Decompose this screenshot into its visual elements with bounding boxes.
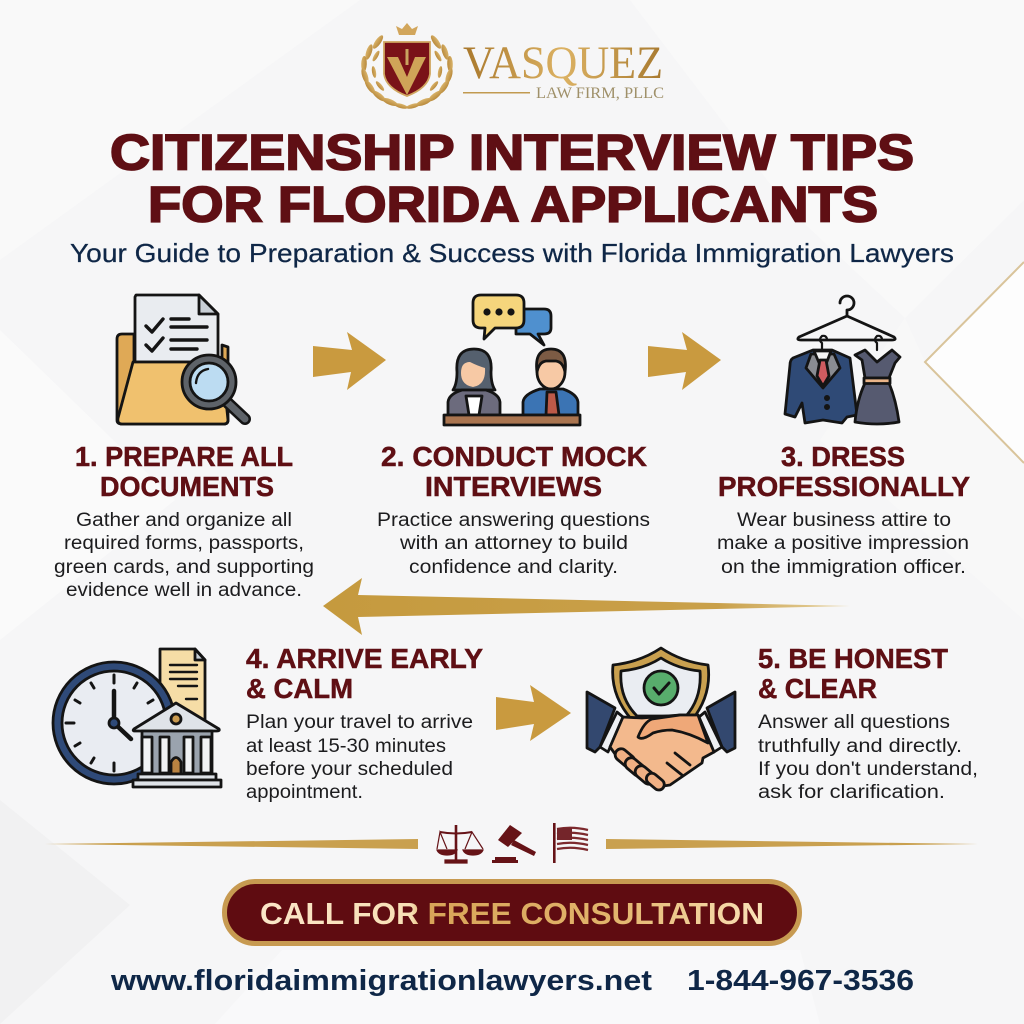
step 2 heading: 2. CONDUCT MOCK (381, 441, 647, 472)
step 3 body (717, 510, 969, 578)
arrow: step 4 to step 5 (496, 685, 571, 741)
logo wordmark: VASQUEZ (463, 37, 663, 89)
title: CITIZENSHIP INTERVIEW TIPS (110, 124, 914, 180)
icon: clock, document and courthouse (53, 649, 221, 787)
step 4 body (246, 712, 473, 803)
subtitle: Your Guide to Preparation & Success with Florida Immigration Lawyers (70, 238, 954, 268)
step 3 text (717, 441, 970, 578)
logo subline: LAW FIRM, PLLC (536, 85, 664, 102)
icon: handshake and shield with check (587, 648, 735, 792)
icon: scales of justice (437, 825, 483, 863)
step 2 heading: INTERVIEWS (425, 471, 602, 502)
step 5 body (758, 712, 978, 803)
step 5 heading: & CLEAR (758, 673, 877, 704)
step 1 heading: DOCUMENTS (100, 471, 274, 502)
step 4 body: before your scheduled (246, 759, 453, 780)
step 1 heading: 1. PREPARE ALL (75, 441, 293, 472)
step 1 heading (75, 441, 293, 502)
step 5 body: ask for clarification. (758, 782, 945, 803)
step 3 body: Wear business attire to (737, 510, 951, 531)
step 3 heading: PROFESSIONALLY (718, 471, 970, 502)
call to action button: CALL FOR FREE CONSULTATION (260, 896, 764, 931)
step 4 body: Plan your travel to arrive (246, 712, 473, 733)
step 2 body (377, 510, 650, 578)
step 1 body: green cards, and supporting (54, 557, 314, 578)
divider: left gold rule (45, 839, 418, 849)
step 5 body: truthfully and directly. (758, 736, 962, 757)
step 5 heading (758, 643, 948, 704)
logo: Vasquez Law Firm (360, 23, 664, 110)
legal icons row (437, 823, 588, 863)
step 2 heading (381, 441, 647, 502)
step 2 body: with an attorney to build (399, 533, 628, 554)
step 4 body: appointment. (246, 782, 363, 803)
step 3 heading: 3. DRESS (781, 441, 905, 472)
long arrow: step 3 back to step 4 (323, 578, 850, 635)
phone number: 1-844-967-3536 (687, 965, 914, 997)
step 3 heading (718, 441, 970, 502)
logo rule (463, 92, 530, 94)
step 5 text (758, 643, 978, 803)
icon: American flag (553, 823, 588, 863)
step 2 body: Practice answering questions (377, 510, 650, 531)
step 3 body: on the immigration officer. (721, 557, 966, 578)
step 1 text (54, 441, 314, 601)
step 1 body: required forms, passports, (64, 533, 304, 554)
step 4 heading (246, 643, 483, 704)
title (110, 124, 914, 232)
step 5 body: If you don't understand, (758, 759, 978, 780)
step 4 body: at least 15-30 minutes (246, 736, 446, 757)
step 4 text (246, 643, 483, 803)
icon: two people with speech bubbles (444, 295, 580, 425)
divider: right gold rule (606, 839, 978, 849)
step 1 body (54, 510, 314, 601)
arrow: step 1 to step 2 (313, 332, 386, 390)
icon: suit and dress on hanger (785, 296, 900, 424)
logo emblem: crown, wreath and shield (360, 23, 454, 110)
icon: folder with checklist and magnifier (117, 295, 245, 424)
arrow: step 2 to step 3 (648, 332, 721, 390)
icon: gavel (492, 825, 536, 863)
step 3 body: make a positive impression (717, 533, 969, 554)
step 2 text (377, 441, 650, 578)
step 4 heading: 4. ARRIVE EARLY (246, 643, 483, 674)
step 5 heading: 5. BE HONEST (758, 643, 948, 674)
step 1 body: evidence well in advance. (66, 580, 302, 601)
title: FOR FLORIDA APPLICANTS (148, 176, 878, 232)
step 5 body: Answer all questions (758, 712, 950, 733)
call to action button (224, 882, 800, 944)
website: www.floridaimmigrationlawyers.net (110, 965, 652, 997)
decorative gold chevron at right edge (925, 262, 1024, 463)
step 2 body: confidence and clarity. (409, 557, 618, 578)
step 1 body: Gather and organize all (76, 510, 292, 531)
step 4 heading: & CALM (246, 673, 353, 704)
